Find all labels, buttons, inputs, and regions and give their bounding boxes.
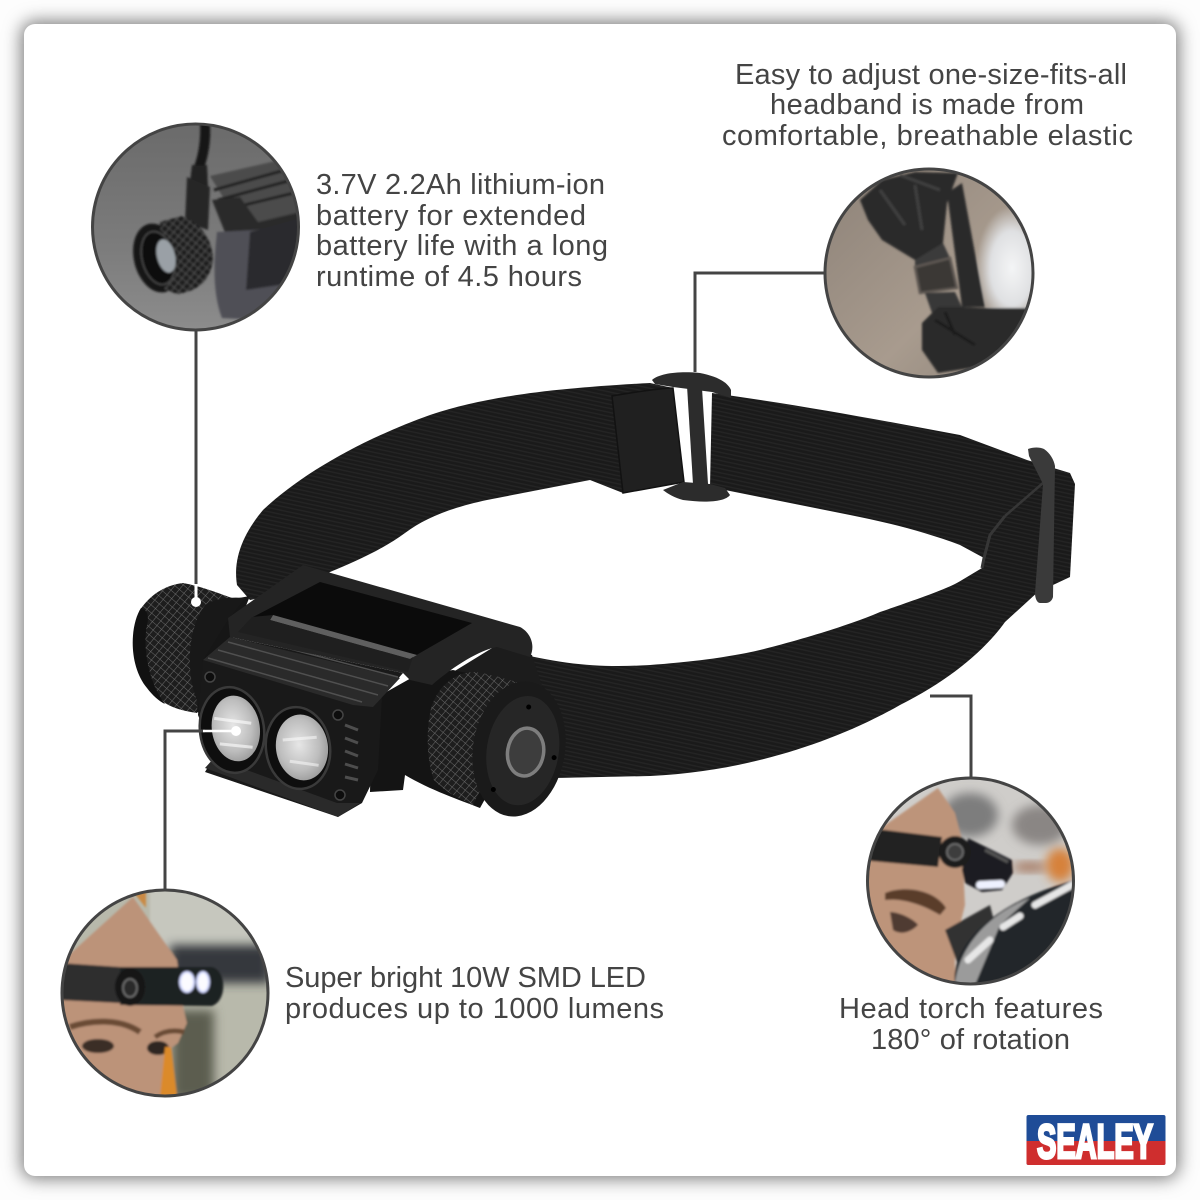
text: battery: runtime of 4.5 hours	[316, 261, 582, 293]
heat-sink fins	[345, 725, 358, 780]
frame window	[253, 582, 472, 657]
mounting lip	[205, 758, 360, 817]
top ridged face	[203, 637, 400, 707]
text: rotation: 180° of rotation	[871, 1024, 1070, 1056]
circle outline: battery	[92, 124, 298, 330]
photo: LED lit on forehead	[64, 892, 266, 1094]
text: LED	[285, 962, 664, 1025]
headband	[236, 372, 1075, 778]
text: battery: battery for extended	[316, 200, 586, 232]
torch: rear knurled barrel	[133, 583, 250, 714]
text: headband: headband is made from	[770, 89, 1084, 121]
text: LED: Super bright 10W SMD LED	[285, 962, 646, 994]
circle outline: headband	[825, 169, 1033, 377]
text: rotation	[839, 993, 1103, 1056]
photo: charging cable in rear barrel	[90, 120, 302, 334]
text: battery	[316, 169, 608, 293]
screws	[205, 672, 345, 800]
leader lines	[165, 273, 971, 890]
text: battery: 3.7V 2.2Ah lithium-ion	[316, 169, 605, 201]
text: LED: produces up to 1000 lumens	[285, 993, 664, 1025]
text: headband	[722, 59, 1133, 152]
text: battery: battery life with a long	[316, 230, 608, 262]
torch: lamp housing	[194, 565, 532, 817]
photo: torch rotated on forehead	[869, 780, 1072, 982]
right strap slider	[1028, 448, 1055, 603]
torch: front barrel and end cap	[370, 645, 575, 823]
photo: gloved hands adjusting strap	[826, 170, 1032, 376]
text: rotation: Head torch features	[839, 993, 1103, 1025]
front face	[198, 637, 403, 817]
text: headband: comfortable, breathable elastic	[722, 120, 1133, 152]
mounting frame	[228, 565, 532, 685]
circle outline: rotation	[868, 778, 1074, 984]
lenses	[194, 683, 270, 777]
product: head torch with elastic headband	[133, 372, 1075, 823]
circle outline: LED	[62, 890, 268, 1096]
text: headband: Easy to adjust one-size-fits-all	[735, 59, 1127, 91]
centre strap slider	[652, 372, 731, 502]
end cap	[463, 675, 575, 823]
pointer overlays	[165, 584, 241, 736]
